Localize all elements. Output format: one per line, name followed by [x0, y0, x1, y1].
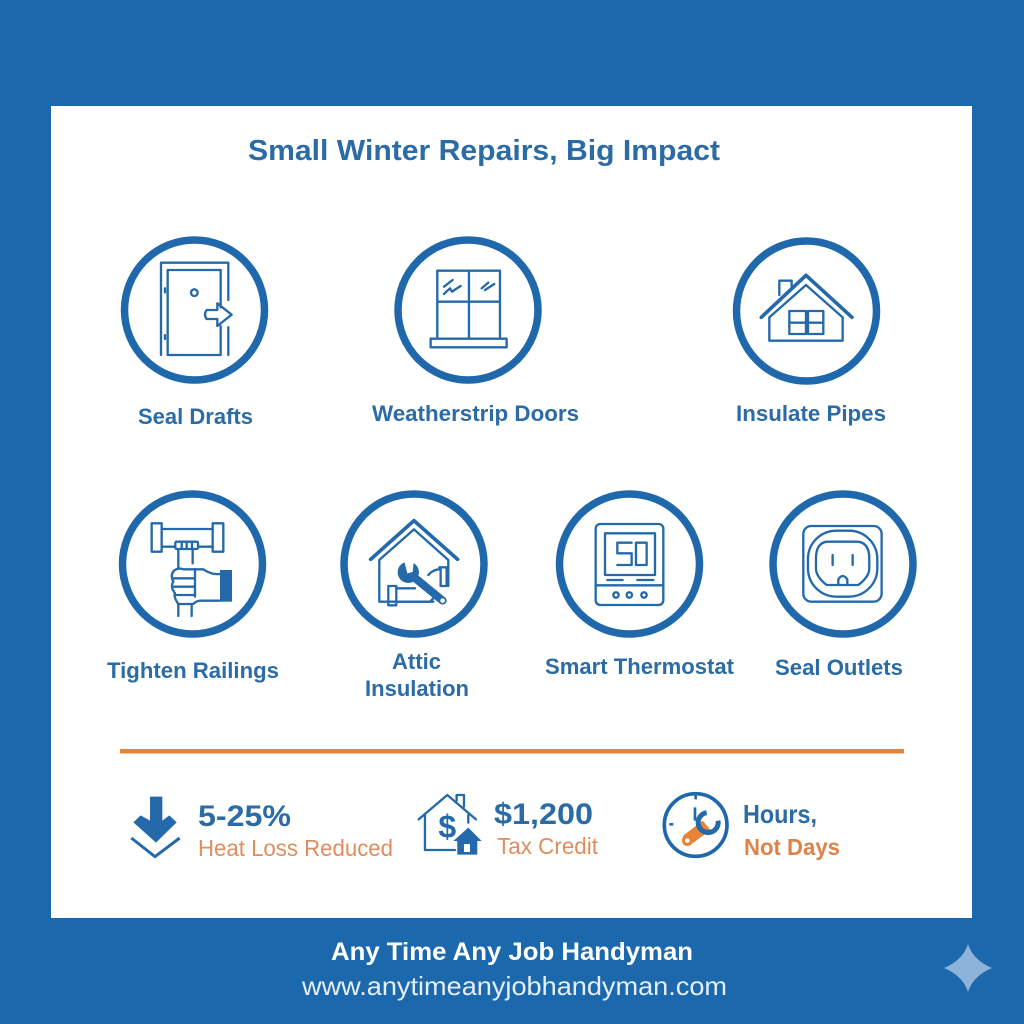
footer: website: www.anytimeanyjobhandyman.com	[301, 971, 727, 1001]
stat: heat loss reduced: Heat Loss Reduced	[198, 835, 393, 861]
title: Small Winter Repairs, Big Impact	[248, 135, 720, 167]
icon: smart thermostat	[560, 494, 700, 634]
label: Insulate Pipes: Insulate Pipes	[736, 401, 886, 426]
icon: clock with wrench	[664, 794, 727, 856]
icon: sparkle	[944, 944, 992, 992]
stat: heat loss reduced	[131, 797, 393, 861]
stat: hours not days	[664, 794, 840, 860]
stat: tax credit	[419, 795, 599, 859]
icon: house with wrench	[344, 494, 484, 634]
icon: wall outlet	[773, 494, 913, 634]
panel: white card	[51, 106, 972, 918]
icon: house	[736, 241, 876, 381]
label: Seal Drafts: Seal Drafts	[138, 404, 253, 429]
footer: business name: Any Time Any Job Handyman	[331, 938, 693, 966]
label: Seal Outlets: Seal Outlets	[775, 655, 903, 680]
label: Attic Insulation: Insulation	[365, 676, 469, 701]
label: Tighten Railings: Tighten Railings	[107, 658, 279, 683]
label: Smart Thermostat: Smart Thermostat	[545, 654, 735, 679]
label: Attic Insulation	[365, 649, 469, 701]
icon: down arrow	[131, 797, 180, 857]
stat: tax credit: $1,200	[494, 798, 593, 831]
icon: house with dollar: $	[438, 808, 456, 844]
label: Attic Insulation: Attic	[392, 649, 441, 674]
stat: hours not days: Hours,	[743, 799, 817, 829]
icon: window	[398, 240, 538, 380]
stat: heat loss reduced: 5-25%	[198, 800, 291, 833]
icon: door with draft arrow	[124, 240, 264, 380]
stat: tax credit: Tax Credit	[497, 833, 599, 859]
label: Weatherstrip Doors: Weatherstrip Doors	[372, 401, 579, 426]
stat: hours not days: Not Days	[744, 834, 840, 860]
icon: hand tightening railing	[122, 494, 262, 634]
icon: house with dollar	[419, 795, 482, 855]
